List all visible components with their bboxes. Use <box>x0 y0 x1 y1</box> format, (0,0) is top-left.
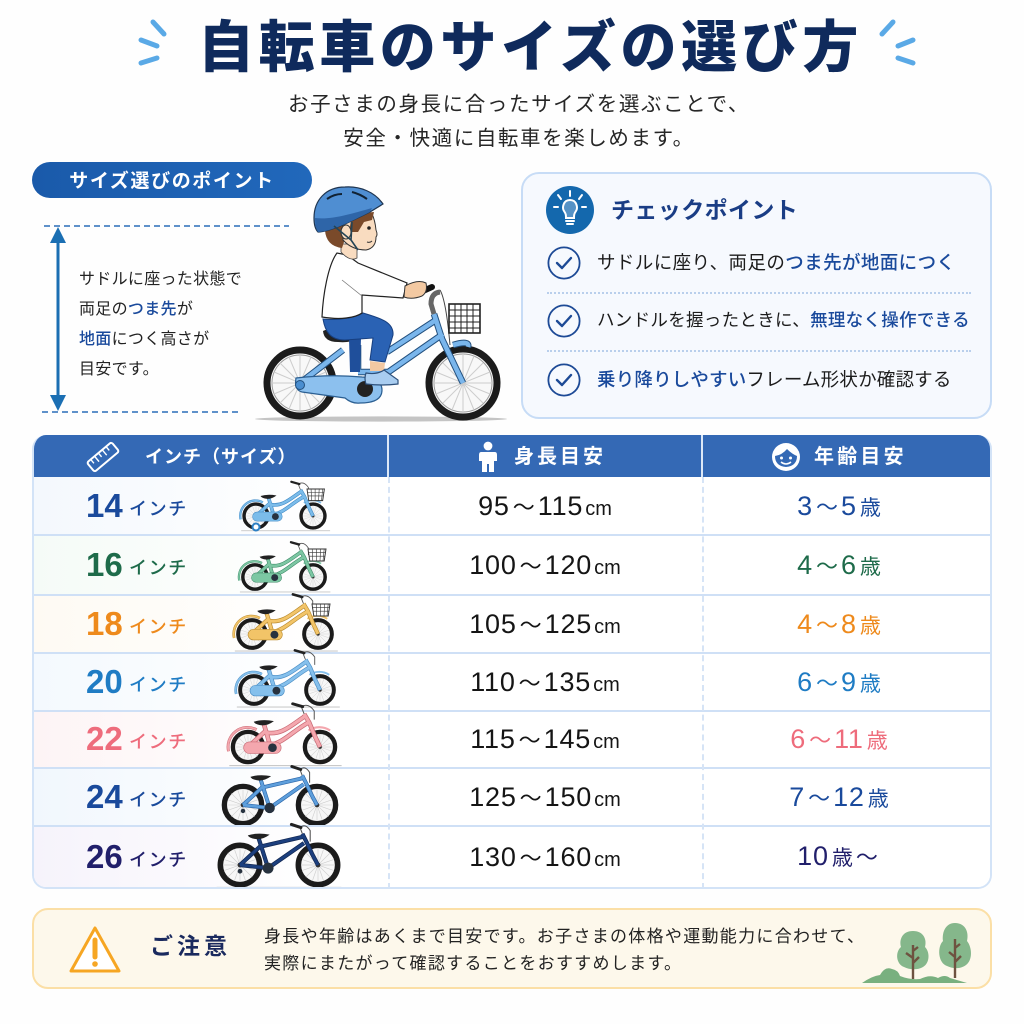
front wheel <box>429 349 497 417</box>
heading pill: サイズ選びのポイント <box>69 171 275 192</box>
row: 14 inch <box>34 477 990 534</box>
icon: title sparkles left <box>138 20 166 66</box>
row: 20 inch: 20 <box>86 663 123 700</box>
size <box>86 487 188 524</box>
size <box>86 546 188 583</box>
panel: caution <box>32 908 992 989</box>
face <box>343 214 377 250</box>
column dividers <box>388 477 390 889</box>
header: age: 年齢目安 <box>814 446 907 468</box>
rider shirt <box>322 253 407 318</box>
heading: チェックポイント <box>611 197 798 223</box>
neck <box>341 244 357 259</box>
subtitle <box>288 93 750 150</box>
check row 3 <box>548 364 952 396</box>
icon: bike <box>226 702 342 766</box>
row: 18 inch: インチ <box>129 617 188 637</box>
text: 乗り降りしやすいフレーム形状か確認する <box>597 369 952 390</box>
text: ハンドルを握ったときに、無理なく操作できる <box>597 310 970 330</box>
icon: bike <box>202 827 352 891</box>
icon: light bulb <box>546 186 594 234</box>
panel: check points <box>521 172 992 419</box>
panel: size point <box>32 162 507 422</box>
row: 22 inch: 22 <box>86 720 123 757</box>
age: 10歳～ <box>797 841 878 871</box>
basket <box>449 304 480 333</box>
row: 26 inch <box>34 825 990 889</box>
row: 16 inch: 16 <box>86 546 123 583</box>
icon: check <box>548 304 580 338</box>
divider <box>547 292 971 294</box>
row: 14 inch: インチ <box>129 499 188 519</box>
text block: 身長や年齢はあくまで目安です。お子さまの体格や運動能力に合わせて、 <box>264 927 865 946</box>
text block: description: 目安です。 <box>79 361 159 378</box>
age: 4～8歳 <box>797 609 881 639</box>
icon: bike <box>238 541 330 592</box>
header: inch: インチ（サイズ） <box>145 447 296 467</box>
heading: ご注意 <box>150 933 231 959</box>
divider <box>387 435 389 477</box>
chain guard <box>296 376 382 403</box>
arrow: height range <box>42 225 289 413</box>
row: 20 inch <box>34 652 990 710</box>
straps <box>334 222 358 250</box>
far leg <box>349 338 361 372</box>
divider <box>547 350 971 352</box>
row: 18 inch: 18 <box>86 605 123 642</box>
text block: description: サドルに座った状態で <box>79 271 242 288</box>
size <box>86 663 188 700</box>
frame <box>300 290 468 383</box>
row: 22 inch <box>34 710 990 767</box>
text block: description: 両足のつま先が <box>79 301 193 318</box>
icon: person <box>479 442 497 472</box>
rider trousers <box>323 313 393 362</box>
text block: description: 地面につく高さが <box>79 331 209 348</box>
age: 3～5歳 <box>797 491 881 521</box>
helmet <box>314 187 383 232</box>
text: サドルに座り、両足のつま先が地面につく <box>597 252 955 273</box>
icon: warning triangle <box>68 923 122 977</box>
text block: description <box>79 270 242 378</box>
height: 125～150cm <box>469 782 621 812</box>
subtitle: お子さまの身長に合ったサイズを選ぶことで、 <box>288 93 750 116</box>
row: 24 inch: インチ <box>129 790 188 810</box>
size <box>34 768 990 770</box>
height: 95～115cm <box>478 491 612 521</box>
icon: ruler <box>86 442 120 472</box>
row: 16 inch: インチ <box>129 558 188 578</box>
icon: trees <box>860 920 972 986</box>
row: 20 inch: インチ <box>129 675 188 695</box>
illustration: child riding a bike <box>255 186 507 422</box>
row: 14 inch: 14 <box>86 487 123 524</box>
icon: bike <box>202 769 352 827</box>
row: 26 inch: 26 <box>86 838 123 875</box>
divider <box>701 435 703 477</box>
handlebar grip <box>414 287 432 295</box>
check row 2 <box>548 304 970 338</box>
row: 18 inch <box>34 594 990 652</box>
saddle <box>323 329 358 342</box>
size <box>34 826 990 828</box>
age: 4～6歳 <box>797 550 881 580</box>
ear <box>341 225 351 239</box>
icon: child face <box>772 443 800 471</box>
rear wheel <box>267 350 333 416</box>
icon: bike <box>234 649 340 708</box>
hands <box>404 282 426 298</box>
text block: 実際にまたがって確認することをおすすめします。 <box>264 954 682 973</box>
row: 22 inch: インチ <box>129 732 188 752</box>
height: 115～145cm <box>470 724 620 754</box>
icon: bike <box>239 480 330 532</box>
hair back <box>325 224 350 248</box>
row: 26 inch: インチ <box>129 850 188 870</box>
size <box>86 720 188 757</box>
subtitle: 安全・快適に自転車を楽しめます。 <box>343 127 695 150</box>
icon: check <box>548 364 580 396</box>
age: 7～12歳 <box>789 782 889 812</box>
height: 105～125cm <box>469 609 621 639</box>
shoe <box>365 370 398 385</box>
height: 110～135cm <box>470 667 620 697</box>
age: 6～9歳 <box>797 667 881 697</box>
height: 130～160cm <box>469 842 621 872</box>
table: size chart <box>32 435 992 889</box>
text block <box>264 923 865 977</box>
header: height: 身長目安 <box>514 446 606 468</box>
heading pill <box>32 162 312 198</box>
icon: bike <box>232 593 338 652</box>
height: 100～120cm <box>469 550 621 580</box>
column dividers <box>702 477 704 889</box>
row: 24 inch: 24 <box>86 778 123 815</box>
icon: check <box>548 246 580 280</box>
row: 16 inch <box>34 534 990 594</box>
size <box>86 605 188 642</box>
check row 1 <box>548 246 955 280</box>
table header <box>32 435 992 477</box>
title: 自転車のサイズの選び方 <box>198 16 863 79</box>
row: 24 inch <box>34 767 990 825</box>
age: 6～11歳 <box>790 724 888 754</box>
icon: title sparkles right <box>880 20 916 66</box>
